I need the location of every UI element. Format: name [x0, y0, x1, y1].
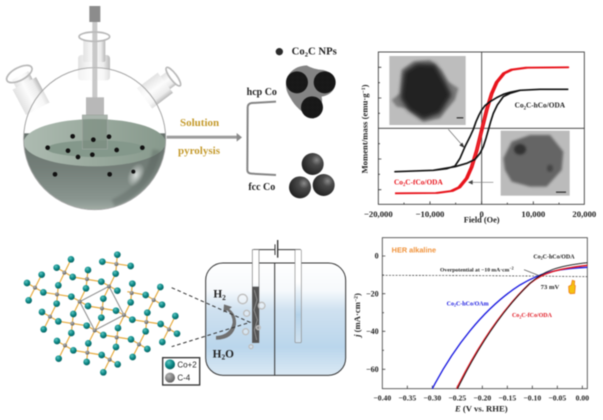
legend: Co2C NPs: 2	[305, 52, 309, 59]
TEM image: hCo particle	[389, 56, 466, 125]
x axis tick labels: −20,000	[364, 209, 393, 219]
atom legend box	[163, 358, 200, 385]
legend: Co2C NPs	[276, 46, 337, 59]
label: Co2C-hCo/ODA: 2	[541, 256, 543, 261]
label: Co2C-fCo/ODA: Co	[512, 313, 519, 319]
x axis tick labels	[364, 209, 596, 219]
label: Co2C-hCo/ODA: C-hCo/ODA	[543, 254, 575, 260]
legend: Co2C NPs: Co	[292, 46, 305, 57]
x axis title: Field (Oe)	[464, 216, 500, 225]
label: Co2C-fCo/ODA: 2	[519, 314, 521, 319]
zoom lines from lattice	[172, 288, 250, 347]
label: solution pyrolysis	[178, 117, 221, 157]
atom legend box: C-4	[177, 374, 191, 383]
y axis tick labels: −20	[366, 289, 379, 298]
x axis tick labels	[373, 393, 589, 402]
TEM image: fCo particle	[501, 131, 570, 196]
label: H2: 2	[222, 293, 226, 302]
x axis tick labels: −0.05	[548, 393, 566, 402]
label: Co2C-fCo/ODA: C-fCo/ODA	[521, 313, 553, 319]
carbon atoms	[33, 262, 171, 362]
arrow: to hCo curve	[448, 129, 465, 148]
curve: Co2C-fCo/ODA red	[457, 265, 587, 389]
bracket	[247, 102, 276, 175]
label: Co2C-hCo/OAm: C-hCo/OAm	[456, 301, 489, 307]
label: fcc Co: fcc Co	[248, 182, 275, 193]
liquid in flask	[20, 119, 170, 212]
x axis tick labels: 0	[480, 209, 484, 219]
y axis title: j (mA·cm	[352, 302, 362, 337]
label: Co2C-hCo/OAm: 2	[454, 303, 456, 308]
left electrode tube	[252, 250, 259, 343]
x axis tick labels: 20,000	[572, 209, 596, 219]
label: Co2C-hCo/ODA: 2	[524, 106, 527, 111]
label: 73 mV: 73 mV	[541, 284, 560, 291]
x axis tick labels: −0.30	[423, 393, 441, 402]
y axis title: Moment/mass (emu·g	[360, 93, 370, 174]
label: HER alkaline: HER alkaline	[392, 245, 436, 254]
cell body with electrolyte	[206, 263, 346, 375]
lattice bonds	[27, 255, 177, 372]
label: Co2C-fCo/ODA: 2	[403, 183, 406, 188]
panel: electrolysis cell	[163, 240, 346, 385]
right electrode tube	[295, 250, 301, 343]
x axis tick labels: −10,000	[416, 209, 444, 219]
label: Co2C-fCo/ODA: Co	[394, 177, 403, 186]
flask left neck	[4, 62, 50, 115]
arrow: to fCo curve	[468, 180, 493, 185]
plot frame and axes	[378, 52, 584, 204]
label: Co2C-fCo/ODA: C-fCo/ODA	[405, 177, 443, 186]
chart: magnetic hysteresis loops	[360, 52, 596, 225]
flask glass bulb	[24, 68, 166, 210]
y axis tick labels: 0	[375, 252, 379, 261]
fcc Co particle cluster	[289, 153, 335, 198]
overpotential pointer	[524, 270, 539, 276]
label: Co2C-hCo/ODA: Co	[533, 254, 541, 260]
arrow: solution pyrolysis	[167, 133, 242, 142]
y axis title: )	[352, 293, 362, 296]
x axis tick labels: −0.20	[473, 393, 491, 402]
atom legend box: Co+2	[177, 360, 197, 369]
wire and battery	[253, 240, 301, 258]
label: Co2C-hCo/OAm: Co	[447, 301, 454, 307]
label: overpotential: Overpotential at −10 mA·cm	[440, 268, 509, 274]
panel: Co2C crystal lattice	[24, 251, 180, 376]
x axis title: E (V vs. RHE)	[454, 403, 508, 413]
unit cell outline	[80, 286, 124, 330]
cell divider	[273, 263, 276, 375]
x axis tick labels: 0.00	[576, 393, 589, 402]
cobalt atoms	[24, 251, 180, 376]
label: solution pyrolysis: pyrolysis	[178, 145, 221, 157]
curve: Co2C-fCo/ODA red loop	[395, 67, 568, 193]
label: solution pyrolysis: Solution	[180, 117, 219, 129]
label: H2O: 2	[221, 353, 225, 362]
label: overpotential: −2	[509, 266, 514, 271]
x axis tick labels: −0.15	[498, 393, 516, 402]
label: hcp Co: hcp Co	[247, 87, 277, 98]
plot frame and ticks	[382, 238, 587, 389]
hcp Co particle cluster	[286, 65, 336, 119]
bubbles	[238, 294, 265, 349]
label: Co2C-hCo/ODA: Co	[515, 101, 524, 110]
y axis tick labels: −60	[366, 365, 379, 374]
legend: Co2C NPs: C NPs	[308, 46, 337, 57]
stirrer rod	[82, 6, 107, 149]
icon: thumbs up	[569, 280, 575, 294]
y axis title: )	[360, 84, 370, 87]
x axis tick labels: −0.25	[448, 393, 466, 402]
x axis tick labels: 10,000	[521, 209, 545, 219]
curve: Co2C-hCo/ODA black loop	[395, 89, 568, 172]
y axis title: −1	[361, 87, 367, 93]
x axis tick labels: −0.10	[523, 393, 541, 402]
overpotential reference line	[382, 275, 587, 277]
curve: Co2C-hCo/OAm blue	[432, 267, 587, 389]
x axis tick labels: −0.35	[398, 393, 416, 402]
y axis title: −2	[353, 296, 359, 302]
y axis tick labels: −40	[366, 327, 379, 336]
panel: nanoparticle products	[247, 46, 337, 198]
x axis tick labels: −0.40	[373, 393, 391, 402]
flask centre neck and joint	[78, 32, 110, 80]
curve: Co2C-hCo/ODA black	[458, 263, 587, 389]
nanoparticles in liquid	[45, 134, 145, 177]
label: H2O: H	[213, 348, 221, 360]
y axis tick labels	[366, 252, 379, 374]
flask right neck	[137, 65, 184, 108]
curved reaction arrow	[216, 304, 236, 340]
label: Co2C-hCo/ODA: C-hCo/ODA	[526, 101, 566, 110]
panel: reaction flask	[4, 6, 184, 212]
chart: HER polarization curves	[352, 238, 589, 413]
label: H2O: O	[225, 348, 234, 360]
label: H2: H	[213, 289, 222, 301]
